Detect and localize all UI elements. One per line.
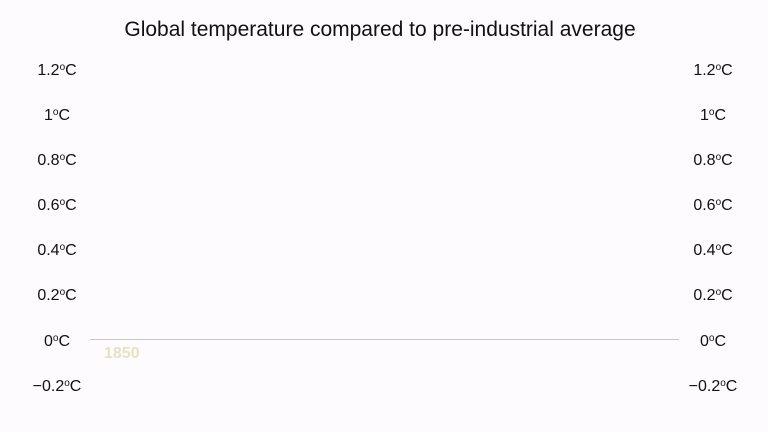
right axis labels: 0.2oC [693,287,733,304]
left axis labels: 0.2oC [37,287,77,304]
left axis labels: 1.2oC [37,62,77,79]
right axis labels: −0.2oC [689,378,737,395]
right axis labels: 0.4oC [693,242,733,259]
left axis labels: 0.4oC [37,242,77,259]
right axis labels: 0.6oC [693,197,733,214]
right axis labels: 1.2oC [693,62,733,79]
right axis labels: 0.8oC [693,152,733,169]
left axis labels: 0.6oC [37,197,77,214]
year label: 1850 [104,345,140,362]
left axis labels: 1oC [44,107,70,124]
zero baseline [90,339,679,340]
right axis labels: 0oC [700,333,726,350]
right axis labels: 1oC [700,107,726,124]
left axis labels: 0oC [44,333,70,350]
title: Global temperature compared to pre-industrial average [124,18,636,41]
left axis labels: −0.2oC [33,378,81,395]
left axis labels: 0.8oC [37,152,77,169]
